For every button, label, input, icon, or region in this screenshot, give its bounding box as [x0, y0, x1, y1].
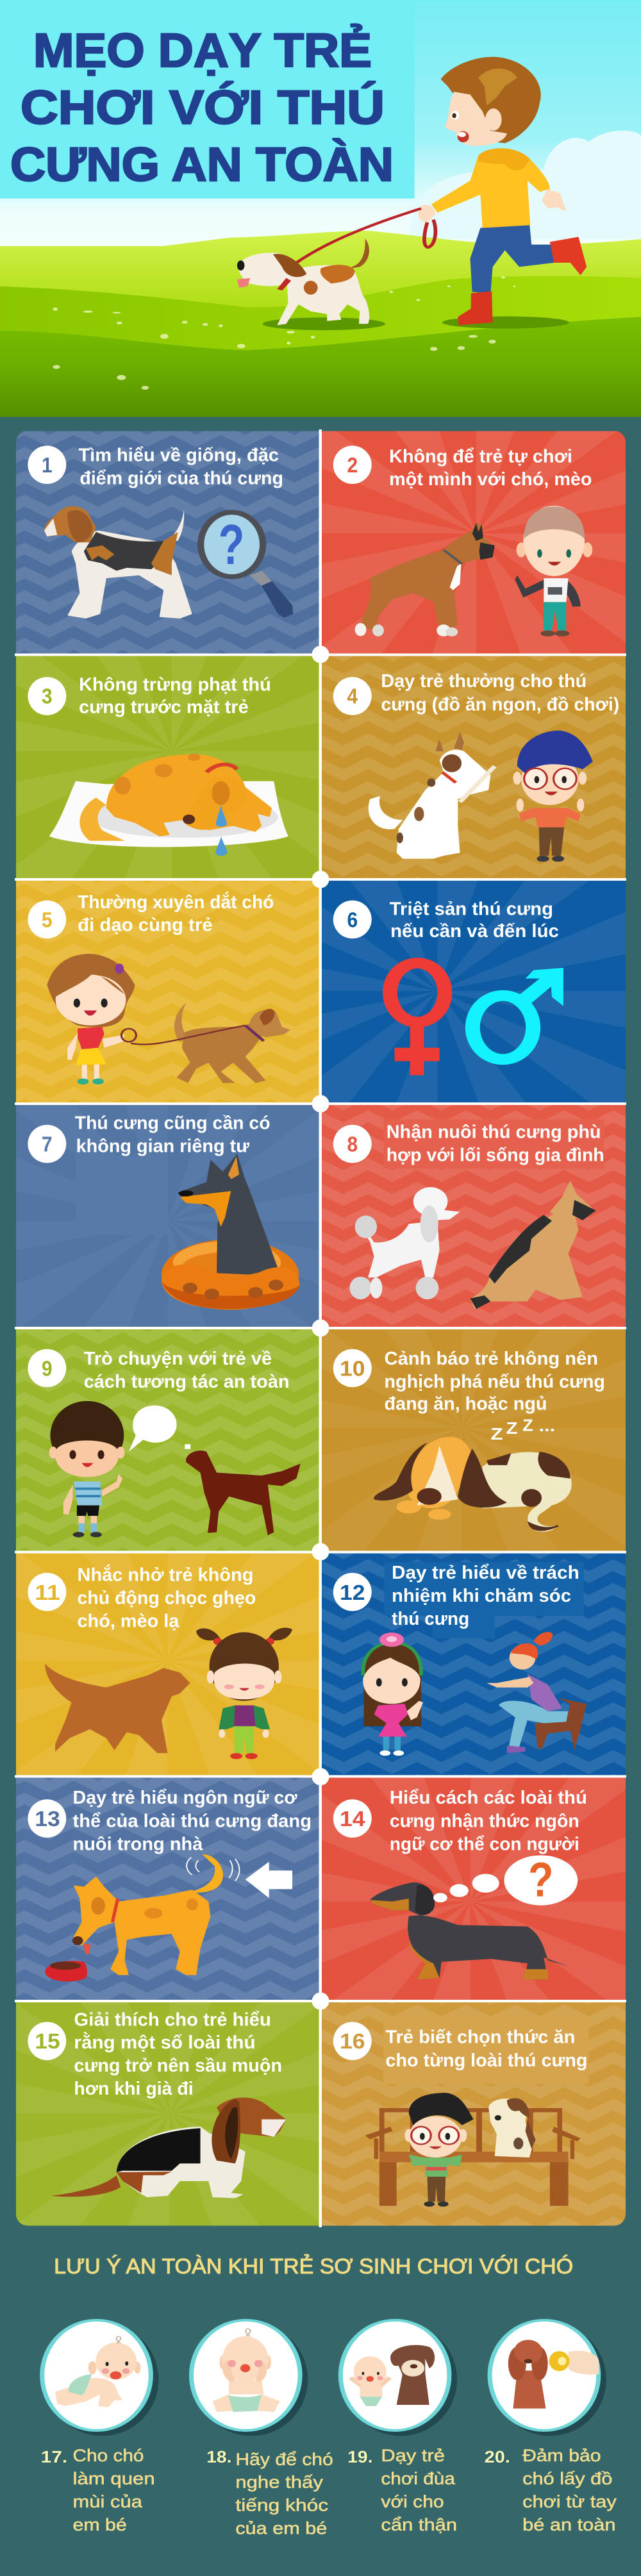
icon: sleeping dog	[374, 1437, 572, 1532]
note 19: cẩn thận	[381, 2515, 457, 2534]
back hill	[0, 231, 641, 312]
panel: tip 1: 1	[42, 453, 53, 477]
panel: tip 9: 9	[42, 1357, 53, 1381]
note 17	[41, 2447, 155, 2534]
icon: magnifier: ?	[219, 513, 244, 576]
icon: snoring letters: Z	[506, 1419, 517, 1438]
note 18: tiếng khóc	[235, 2496, 328, 2515]
panel: tip 16: 16	[340, 2030, 365, 2054]
icon: orange dog with bowl	[45, 1854, 223, 1981]
note 20: Đảm bảo	[522, 2447, 601, 2465]
icon: snoring letters: Z	[490, 1425, 503, 1443]
panel: tip 11: Nhắc nhở trẻ không	[78, 1564, 253, 1585]
panel: tip 11: 11	[35, 1581, 60, 1604]
panel: tip 16	[321, 2001, 626, 2227]
panel: tip 7	[16, 1105, 319, 1327]
note 17: làm quen	[73, 2470, 155, 2489]
title text: CƯNG AN TOÀN	[10, 138, 394, 191]
icon: dachshund	[370, 1882, 569, 1979]
icon: wagging lines	[187, 1857, 239, 1881]
icon: boy on bench	[404, 2093, 474, 2207]
panel: tip 15: Giải thích cho trẻ hiểu	[74, 2009, 271, 2030]
icon: thought bubble: ?	[528, 1853, 554, 1907]
panel: tip 7: Thú cưng cũng cần có	[75, 1113, 271, 1133]
note 19	[347, 2447, 457, 2534]
icon: male symbol	[472, 968, 563, 1059]
icon: german shepherd	[470, 1181, 596, 1309]
panel: tip 11: chủ động chọc ghẹo	[78, 1588, 256, 1608]
panel: tip 12: thú cưng	[392, 1609, 469, 1629]
dog on leash	[237, 238, 385, 330]
title text: MẸO DẠY TRẺ	[33, 24, 372, 77]
icon: thought bubble	[433, 1853, 578, 1907]
boy walking	[418, 57, 587, 329]
icon: snoring letters: Z	[522, 1416, 533, 1434]
panel: tip 13: nuôi trong nhà	[73, 1834, 203, 1854]
note 17: 17.	[41, 2447, 67, 2466]
clouds	[409, 131, 641, 239]
flowers	[53, 276, 515, 390]
panel: tip 2	[322, 431, 626, 654]
panel: tip 15: hơn khi già đi	[74, 2078, 194, 2098]
panel: tip 6	[322, 881, 626, 1102]
icon: dog on leash	[121, 1003, 290, 1083]
panel: tip 6: nếu cần và đến lúc	[390, 921, 559, 942]
note 18: Hãy để chó	[235, 2450, 333, 2470]
note 18: 18.	[206, 2447, 232, 2466]
panel: tip 15: cưng trở nên sầu muộn	[74, 2055, 282, 2076]
tips grid	[0, 324, 641, 2320]
icon: curly boy	[49, 1401, 125, 1537]
sky	[0, 0, 641, 250]
icon: boy waving	[515, 506, 592, 636]
panel: tip 5: 5	[42, 908, 53, 932]
icon: white arrow	[246, 1862, 292, 1898]
icon: woman on chair	[487, 1632, 587, 1753]
panel: tip 4: 4	[347, 685, 358, 708]
note 20: 20.	[485, 2447, 510, 2466]
icon: magnifier	[201, 512, 293, 618]
note 20	[485, 2447, 617, 2534]
panel: tip 10	[322, 1329, 626, 1551]
circle: dog and hand with toy	[490, 2320, 606, 2436]
panel: tip 6: 6	[347, 908, 358, 932]
note 18	[206, 2447, 333, 2538]
icon: speech bubble	[129, 1406, 177, 1452]
panel: tip 13: 13	[35, 1807, 60, 1831]
panel: tip 3: 3	[42, 685, 53, 708]
panel: tip 14: 14	[340, 1807, 365, 1831]
title text	[10, 24, 394, 191]
icon: boxer dog	[355, 523, 495, 636]
panel: tip 2: Không để trẻ tự chơi	[389, 446, 572, 467]
icon: basset hound	[51, 2098, 286, 2198]
panel: tip 11	[16, 1554, 319, 1775]
panel: tip 15: 15	[35, 2030, 60, 2054]
panel: tip 5	[16, 880, 320, 1104]
note 19: chơi đùa	[381, 2470, 456, 2489]
panel: tip 13: thể của loài thú cưng đang	[73, 1811, 312, 1831]
icon: snoring letters	[491, 1419, 554, 1440]
panel: tip 15: rằng một số loài thú	[74, 2032, 256, 2053]
leash	[296, 208, 435, 263]
panel: tip 6: Triệt sản thú cưng	[390, 899, 553, 919]
note 17: Cho chó	[73, 2447, 144, 2465]
panel: tip 9	[16, 1329, 320, 1552]
foreground grass	[0, 317, 641, 417]
panel: tip 1: Tìm hiểu về giống, đặc	[78, 445, 279, 465]
panel: tip 11: chó, mèo lạ	[78, 1611, 179, 1631]
panel: tip 8: 8	[347, 1132, 358, 1156]
icon: girl with pigtails	[196, 1628, 292, 1759]
panel: tip 8	[321, 1104, 626, 1328]
panel: tip 5: Thường xuyên dắt chó	[78, 891, 274, 912]
icon: snoring letters: ...	[539, 1417, 555, 1435]
panel: tip 3: Không trừng phạt thú	[79, 675, 271, 695]
circle: baby and dog	[340, 2320, 457, 2436]
panel: tip 9: cách tương tác an toàn	[84, 1372, 290, 1392]
panel: tip 7: 7	[42, 1132, 53, 1156]
panel: tip 13	[16, 1776, 320, 2002]
section: infant safety notes	[41, 2254, 617, 2538]
panel: tip 10: đang ăn, hoặc ngủ	[385, 1394, 547, 1414]
title text: CHƠI VỚI THÚ	[21, 81, 385, 134]
panel: tip 3: cưng trước mặt trẻ	[79, 697, 249, 717]
note 19: Dạy trẻ	[381, 2447, 445, 2465]
panel: tip 16: Trẻ biết chọn thức ăn	[385, 2027, 575, 2047]
grid dividers	[15, 429, 626, 2227]
note 18: nghe thấy	[235, 2473, 323, 2492]
panel: tip 12: nhiệm khi chăm sóc	[392, 1586, 571, 1606]
panel: tip 12	[321, 1552, 626, 1777]
panel: tip 12: Dạy trẻ hiểu về trách	[392, 1563, 579, 1583]
note 19: 19.	[347, 2447, 373, 2466]
panel: tip 1: điểm giới của thú cưng	[79, 468, 283, 488]
circle: baby crawling	[42, 2320, 158, 2436]
icon: red setter	[185, 1444, 301, 1535]
note 18: của em bé	[235, 2519, 327, 2538]
panel: tip 10: 10	[340, 1357, 365, 1381]
icon: dog with bone	[369, 732, 495, 859]
hero scene	[0, 0, 641, 417]
panel: tip 1	[16, 431, 320, 655]
middle hill	[0, 276, 641, 361]
panel: tip 5: đi dạo cùng trẻ	[78, 915, 213, 935]
icon: female symbol	[390, 963, 445, 1076]
icon: girl	[47, 954, 135, 1084]
panel: tip 3	[16, 656, 319, 878]
icon: wooden bench	[365, 2108, 581, 2206]
panel: tip 2: 2	[347, 453, 358, 477]
panel: tip 14	[184, 1695, 641, 2107]
icon: poodle	[349, 1187, 460, 1299]
panel: tip 13: Dạy trẻ hiểu ngôn ngữ cơ	[73, 1788, 297, 1808]
panel: tip 12: 12	[340, 1581, 365, 1604]
icon: boy with glasses	[513, 731, 593, 861]
icon: beagle	[44, 506, 192, 619]
panel: tip 7: không gian riêng tư	[76, 1136, 250, 1156]
icon: girl with flower	[363, 1633, 423, 1756]
circle: baby crying	[191, 2320, 308, 2436]
title box	[0, 0, 415, 199]
note 17: mùi của	[73, 2493, 143, 2511]
icon: doberman in bed	[162, 1154, 300, 1310]
note 17: em bé	[73, 2515, 127, 2534]
panel: tip 4	[321, 654, 626, 880]
icon: sad dog on pillow	[49, 754, 288, 856]
panel: tip 9: Trò chuyện với trẻ về	[84, 1349, 272, 1369]
icon: puppy on bench	[488, 2098, 536, 2157]
panel: tip 15	[0, 1907, 456, 2320]
icon: golden retriever	[45, 1663, 190, 1753]
note 19: với cho	[381, 2493, 444, 2511]
